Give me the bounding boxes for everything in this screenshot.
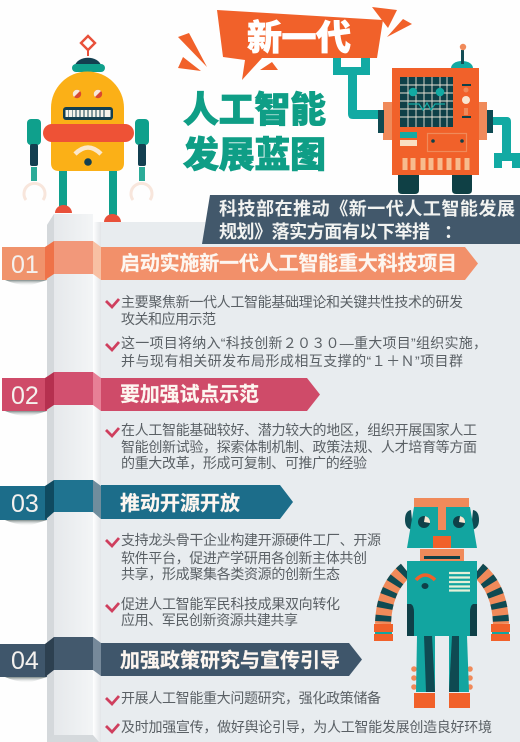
speech bubble with title [178,7,412,80]
title: 人工智能 [183,89,326,130]
arms [333,58,520,168]
bullet: 智能创新试验，探索体制机制、政策法规、人才培育等方面 [121,439,477,455]
bullet: 在人工智能基础较好、潜力较大的地区，组织开展国家人工 [121,422,477,438]
number: 01 [11,251,39,279]
intro banner: ： [444,222,462,242]
intro banner: 规划》落实方面有以下举措 [219,221,430,242]
legs [55,171,121,222]
burst rays [178,7,412,71]
bullets: 支持龙头骨干企业构建开源硬件工厂、开源 [121,532,381,548]
mouth [63,107,113,120]
torso [407,561,477,636]
controls [400,84,471,170]
background panel [101,222,520,742]
arms [383,570,501,624]
bullets: 并与现有相关研发布局形成相互支撑的“１＋Ｎ”项目群 [121,353,463,369]
robot: teal [374,498,510,708]
number: 02 [11,382,39,410]
arms [24,119,152,200]
speech bubble with title: 新一代 [247,19,351,58]
bullet: 的重大改革，形成可复制、可推广的经验 [121,455,367,471]
body [51,72,124,171]
robot: yellow [24,36,152,222]
bullets [106,294,487,369]
bullets: 开展人工智能重大问题研究，强化政策储备 [121,690,381,706]
legs [411,636,473,708]
3D column [47,214,101,742]
bullets [106,690,492,735]
section 02 [2,372,477,471]
section 01 [2,241,487,369]
title: 发展蓝图 [183,134,326,175]
intro banner [202,195,520,244]
section 04 [0,637,492,735]
bullets: 这一项目将纳入“科技创新２０３０—重大项目”组织实施， [121,335,487,351]
antenna [81,36,95,56]
section 03 [0,480,381,628]
legs [398,175,419,194]
bullets: 共享，形成聚集各类资源的创新生态 [121,566,340,582]
bullets: 主要聚焦新一代人工智能基础理论和关键共性技术的研发 [121,294,463,310]
neck [420,549,464,562]
number: 03 [11,490,39,518]
bullets: 应用、军民创新资源共建共享 [121,612,298,628]
heading: 推动开源开放 [120,492,240,515]
bullet [106,422,477,471]
intro banner: 科技部在推动《新一代人工智能发展 [219,198,515,219]
bullets: 软件平台，促进产学研用各创新主体共创 [121,550,367,566]
bullets: 及时加强宣传，做好舆论引导，为人工智能发展创造良好环境 [121,719,492,735]
robot: orange [333,44,520,194]
bullets: 促进人工智能军民科技成果双向转化 [121,596,340,612]
screen [400,77,453,127]
heading: 启动实施新一代人工智能重大科技项目 [120,251,457,275]
head [405,498,479,548]
number: 04 [11,647,39,675]
heading: 加强政策研究与宣传引导 [120,648,340,672]
heading: 要加强试点示范 [120,383,259,406]
bullets: 攻关和应用示范 [121,311,216,327]
title [183,89,326,175]
bullets [106,532,381,628]
